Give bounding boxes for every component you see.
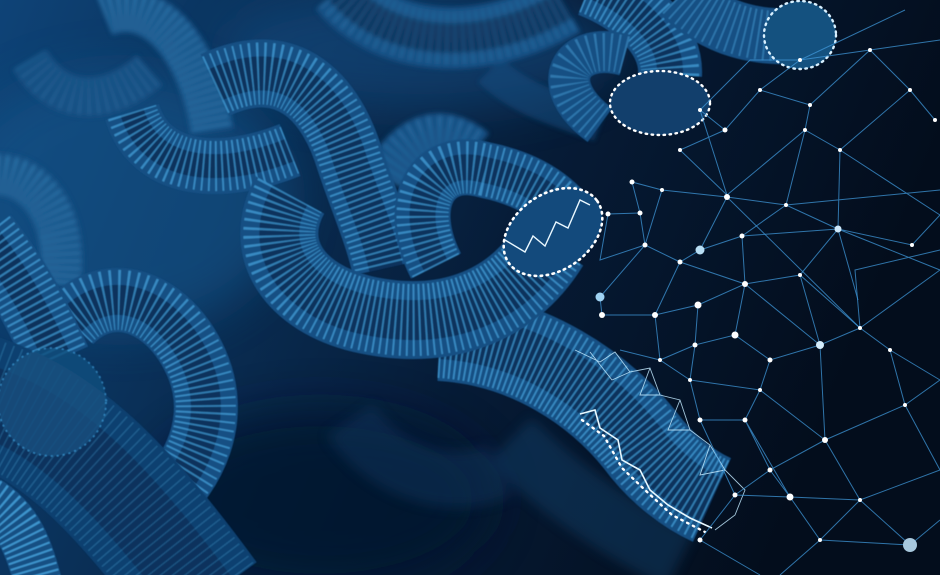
back chain links, out of focus <box>0 0 600 285</box>
chain link: long diagonal tube <box>215 73 386 268</box>
chain link: lower front tube <box>440 335 712 500</box>
chain link: left side curved tube <box>70 300 206 502</box>
dissolving link end: upper <box>610 1 836 135</box>
chain link: left side upright tube <box>0 235 58 360</box>
chain link: lower left large tube <box>0 348 205 575</box>
dissolving end of main link <box>487 170 619 294</box>
reflected chain in lower background <box>350 420 680 560</box>
chain link: main front tube <box>279 195 550 320</box>
chain link: bottom left corner tube <box>0 500 40 575</box>
dissolving end of lower link <box>575 350 745 532</box>
chain link: upper left bend <box>132 112 290 166</box>
network mesh: lines <box>600 10 940 575</box>
chain link: inner loop of main link <box>423 167 575 266</box>
chain link: upper right tubes <box>569 0 805 125</box>
network mesh: nodes <box>596 48 937 552</box>
